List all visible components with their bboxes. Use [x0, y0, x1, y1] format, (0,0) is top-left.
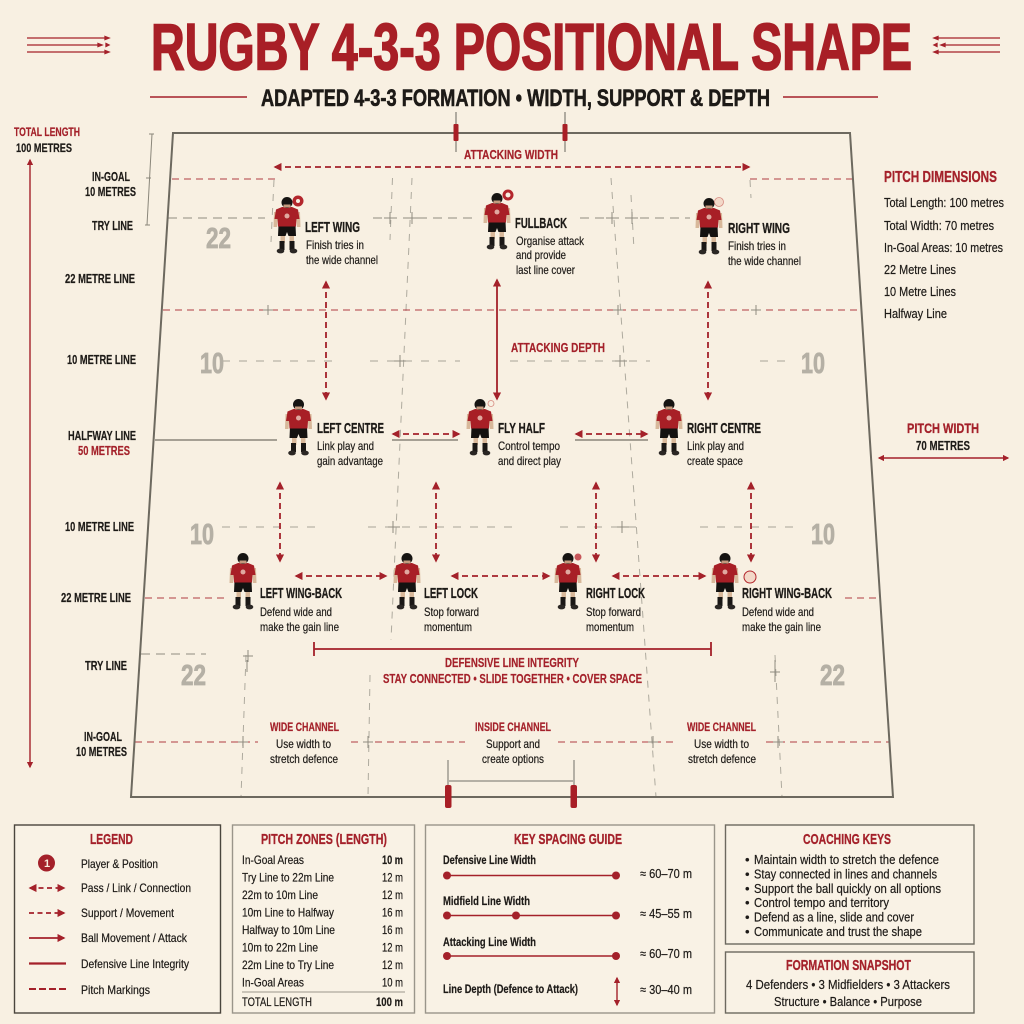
panel: pitch zones: PITCH ZONES (LENGTH) [261, 831, 387, 848]
player: fullback: FULLBACK [515, 215, 567, 232]
panel: coaching keys: COACHING KEYS [803, 831, 891, 848]
panel: formation snapshot: FORMATION SNAPSHOT [786, 957, 911, 974]
panel: key spacing guide: Line Depth (Defence to Attack) [443, 982, 578, 996]
pitch numbers: 22 [206, 223, 231, 255]
panel: pitch dimensions: Halfway Line [884, 306, 947, 321]
player: left wing: the wide channel [306, 253, 378, 267]
pitch numbers: 10 [200, 348, 224, 380]
panel: key spacing guide: ≈ 60–70 m [640, 946, 692, 961]
left scale labels: TOTAL LENGTH [14, 125, 80, 139]
left scale labels: TRY LINE [85, 658, 127, 673]
panel: legend [14, 825, 220, 1013]
panel: formation snapshot: 4 Defenders • 3 Midfielders • 3 Attackers [746, 977, 950, 992]
panel: legend: LEGEND [90, 831, 133, 848]
player: fullback [484, 190, 585, 277]
midfield width bar [443, 912, 620, 920]
pitch outline [131, 133, 893, 797]
wide channel right: Use width to [694, 737, 749, 751]
goal posts: bottom [445, 760, 577, 808]
panel: pitch zones: Halfway to 10m Line [242, 923, 335, 937]
player: left wing-back: make the gain line [260, 620, 339, 634]
icon: support arrow [29, 912, 64, 914]
attacking width: ATTACKING WIDTH [464, 147, 558, 162]
panel: coaching keys: Support the ball quickly on all options [754, 881, 941, 896]
panel: formation snapshot [726, 952, 974, 1013]
left scale labels: 10 METRES [85, 184, 136, 199]
player: right centre [656, 399, 761, 468]
left scale labels: 50 METRES [78, 443, 130, 458]
left scale labels: 10 METRE LINE [65, 519, 134, 534]
panel: pitch dimensions: Total Length: 100 metres [884, 195, 1004, 210]
panel: coaching keys: Communicate and trust the shape [754, 924, 922, 939]
player: left wing [274, 196, 378, 267]
wide channel left: WIDE CHANNEL [270, 720, 339, 734]
panel: pitch zones: 100 m [376, 995, 403, 1009]
callout: pitch width: PITCH WIDTH [907, 420, 979, 436]
icon: right title arrows [934, 36, 1000, 54]
subtitle: ADAPTED 4-3-3 FORMATION • WIDTH, SUPPORT & DEPTH [261, 85, 770, 112]
player: fullback: Organise attack [516, 234, 585, 248]
inside channel: INSIDE CHANNEL [475, 720, 551, 734]
player: right wing-back: make the gain line [742, 620, 821, 634]
panel: pitch zones: 10m Line to Halfway [242, 906, 334, 920]
left scale labels: 10 METRE LINE [67, 352, 136, 367]
player: right centre: Link play and [687, 439, 744, 453]
player: fly half [466, 399, 561, 468]
player: right wing: RIGHT WING [728, 220, 790, 237]
arrows: support and links [280, 280, 751, 576]
player: right lock: momentum [586, 620, 634, 634]
wide channel right: WIDE CHANNEL [687, 720, 756, 734]
pitch numbers: 10 [801, 348, 825, 380]
panel: pitch zones: TOTAL LENGTH [242, 995, 312, 1009]
pitch markings [135, 178, 889, 797]
player: left centre [285, 399, 384, 468]
inside channel [475, 720, 551, 766]
player: right centre: RIGHT CENTRE [687, 420, 761, 437]
panel: key spacing guide: KEY SPACING GUIDE [514, 831, 622, 848]
player: right wing-back [712, 553, 832, 634]
player: right wing [696, 198, 801, 268]
panel: legend: Player & Position [81, 857, 158, 871]
icon: pass arrow [30, 887, 64, 889]
panel: coaching keys: • [745, 910, 750, 924]
inside channel: create options [482, 752, 544, 766]
pitch [131, 112, 893, 808]
player: fullback: last line cover [516, 263, 575, 277]
panel: coaching keys: Defend as a line, slide and cover [754, 910, 915, 924]
panel: pitch zones: 12 m [382, 888, 403, 902]
icon: player marker [38, 854, 55, 872]
left scale labels [14, 125, 154, 767]
panel: formation snapshot: Structure • Balance • Purpose [774, 994, 922, 1009]
panel: key spacing guide: ≈ 60–70 m [640, 866, 692, 881]
icon: defensive line [29, 962, 66, 965]
player: left wing-back: Defend wide and [260, 605, 332, 619]
attacking width bar [443, 952, 620, 960]
panel: pitch dimensions: Total Width: 70 metres [884, 218, 994, 233]
player: fullback: and provide [516, 248, 566, 262]
panel: legend: Ball Movement / Attack [81, 931, 188, 945]
panel: pitch zones [232, 825, 414, 1013]
callout: pitch width: 70 METRES [916, 438, 970, 453]
panel: pitch zones: 10 m [382, 853, 403, 867]
player: left wing: Finish tries in [306, 238, 364, 252]
icon: player marker: 1 [44, 858, 50, 870]
attacking depth: ATTACKING DEPTH [511, 340, 605, 355]
player: left wing: LEFT WING [305, 219, 360, 236]
left scale labels: TRY LINE [92, 218, 133, 233]
panel: legend: Pass / Link / Connection [81, 881, 191, 895]
player: left centre: Link play and [317, 439, 374, 453]
panel: pitch zones: 16 m [382, 906, 403, 920]
player: right lock: Stop forward [586, 605, 641, 619]
pitch numbers: 22 [181, 660, 206, 692]
inside channel: Support and [486, 737, 540, 751]
panel: coaching keys: Stay connected in lines and channels [754, 866, 937, 882]
panel: pitch zones: 12 m [382, 940, 403, 954]
panel: coaching keys [726, 825, 974, 944]
goal posts: top [454, 112, 568, 152]
panel: pitch zones: 22m Line to Try Line [242, 958, 334, 972]
player: fly half: and direct play [498, 454, 561, 468]
player: right lock: RIGHT LOCK [586, 585, 645, 602]
pitch numbers: 10 [811, 519, 835, 551]
panel: coaching keys: • [745, 852, 750, 867]
panel: key spacing guide: Attacking Line Width [443, 935, 536, 949]
panel: key spacing guide [426, 825, 714, 1013]
player: left lock [394, 553, 479, 634]
player: left centre: gain advantage [317, 454, 383, 468]
panel: pitch zones: In-Goal Areas [242, 853, 304, 867]
player: right lock [554, 553, 645, 634]
panel: key spacing guide: ≈ 30–40 m [640, 982, 692, 997]
wide channel right: stretch defence [688, 752, 756, 766]
panel: pitch dimensions: 22 Metre Lines [884, 262, 956, 277]
left scale labels: 100 METRES [16, 141, 72, 155]
panel: coaching keys: Maintain width to stretch the defence [754, 852, 939, 867]
panel: key spacing guide: Defensive Line Width [443, 853, 536, 867]
player: fly half: FLY HALF [498, 420, 545, 437]
pitch numbers [181, 223, 845, 692]
left scale labels: 10 METRES [76, 744, 127, 759]
callout: pitch width [879, 420, 1008, 458]
panel: pitch zones: 16 m [382, 923, 403, 937]
wide channel right [687, 720, 756, 766]
player: left centre: LEFT CENTRE [317, 420, 384, 437]
player: left lock: LEFT LOCK [424, 585, 478, 602]
player: fly half: Control tempo [498, 439, 560, 453]
panel: legend: Pitch Markings [81, 983, 150, 997]
pitch numbers: 22 [820, 660, 845, 692]
panel: pitch zones: 12 m [382, 870, 403, 884]
defensive width bar [443, 872, 620, 880]
player: left lock: momentum [424, 620, 472, 634]
left scale labels: 22 METRE LINE [61, 590, 131, 605]
panel: coaching keys: • [745, 881, 750, 896]
icon: ball arrow [29, 937, 64, 939]
player: right wing-back: Defend wide and [742, 605, 814, 619]
panel: coaching keys: • [745, 924, 750, 939]
pitch numbers: 10 [190, 519, 214, 551]
panel: coaching keys: Control tempo and territory [754, 895, 889, 910]
wide channel left: Use width to [276, 737, 331, 751]
panel: legend: Defensive Line Integrity [81, 957, 189, 971]
player: right wing-back: RIGHT WING-BACK [742, 585, 832, 602]
left scale labels: HALFWAY LINE [68, 428, 136, 443]
player: left wing-back [230, 553, 342, 634]
panel: pitch zones: 12 m [382, 958, 403, 972]
left scale labels: IN-GOAL [84, 729, 122, 744]
player: right wing: the wide channel [728, 254, 801, 268]
player: right centre: create space [687, 454, 743, 468]
panel: key spacing guide: ≈ 45–55 m [640, 906, 692, 921]
icon: pitch marking [29, 988, 66, 990]
panel: pitch dimensions [884, 169, 1004, 321]
panel: legend: Support / Movement [81, 906, 175, 920]
icon: left title arrows [27, 36, 109, 54]
defensive line integrity: DEFENSIVE LINE INTEGRITY [445, 655, 579, 670]
panel: pitch zones: 10 m [382, 976, 403, 990]
panel: pitch dimensions: 10 Metre Lines [884, 284, 956, 299]
left scale labels: IN-GOAL [92, 169, 130, 184]
left scale labels: 22 METRE LINE [65, 271, 135, 286]
defensive line integrity [314, 642, 711, 686]
panel: key spacing guide: Midfield Line Width [443, 894, 530, 908]
depth arrow [616, 978, 618, 1005]
panel: pitch zones: Try Line to 22m Line [242, 870, 334, 884]
defensive line integrity: STAY CONNECTED • SLIDE TOGETHER • COVER SPACE [383, 671, 642, 686]
panel: pitch zones: In-Goal Areas [242, 976, 304, 990]
player: left lock: Stop forward [424, 605, 479, 619]
panel: pitch zones: 22m to 10m Line [242, 888, 318, 902]
player: left wing-back: LEFT WING-BACK [260, 585, 342, 602]
panel: coaching keys: • [745, 895, 750, 910]
player: right wing: Finish tries in [728, 239, 786, 253]
wide channel left: stretch defence [270, 752, 338, 766]
panel: pitch zones: 10m to 22m Line [242, 940, 318, 954]
panel: coaching keys: • [745, 866, 750, 882]
wide channel left [270, 720, 339, 766]
